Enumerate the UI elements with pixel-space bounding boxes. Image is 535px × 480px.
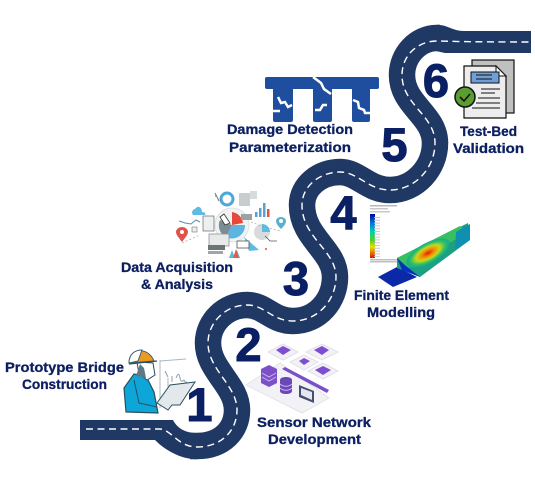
step numbers bbox=[186, 54, 449, 431]
step numbers: 3 bbox=[283, 252, 309, 305]
label: data acquisition and analysis: Data Acquisition bbox=[121, 259, 233, 275]
icon: engineer with blueprint bbox=[124, 350, 195, 413]
label: data acquisition and analysis bbox=[121, 259, 233, 292]
icon: data analysis collage bbox=[176, 191, 286, 258]
winding road bbox=[80, 25, 531, 459]
label: damage detection parameterization: Damage Detection bbox=[227, 121, 353, 137]
step numbers: 4 bbox=[330, 186, 357, 239]
step numbers: 1 bbox=[186, 378, 213, 431]
label: test-bed validation bbox=[453, 123, 524, 156]
step numbers: 6 bbox=[423, 54, 449, 107]
label: sensor network development bbox=[257, 414, 371, 447]
label: damage detection parameterization: Parameterization bbox=[229, 139, 351, 155]
label: prototype bridge construction: Construction bbox=[22, 376, 107, 392]
label: damage detection parameterization bbox=[227, 121, 353, 155]
label: prototype bridge construction bbox=[5, 359, 124, 392]
label: finite element modelling: Modelling bbox=[367, 304, 435, 320]
icon: cracked bridge bbox=[265, 77, 379, 122]
label: sensor network development: Sensor Network bbox=[257, 414, 371, 430]
step numbers: 5 bbox=[381, 118, 408, 171]
label: test-bed validation: Test-Bed bbox=[460, 123, 517, 139]
icon: validation document bbox=[455, 60, 514, 118]
label: finite element modelling: Finite Element bbox=[354, 287, 449, 303]
label: finite element modelling bbox=[354, 287, 449, 320]
label: sensor network development: Development bbox=[268, 431, 361, 447]
icon: finite element model bbox=[370, 205, 470, 287]
label: data acquisition and analysis: & Analysis bbox=[141, 276, 213, 292]
step numbers: 2 bbox=[235, 318, 262, 371]
icon: sensor network platform bbox=[246, 344, 338, 413]
label: prototype bridge construction: Prototype Bridge bbox=[5, 359, 124, 375]
label: test-bed validation: Validation bbox=[453, 140, 524, 156]
